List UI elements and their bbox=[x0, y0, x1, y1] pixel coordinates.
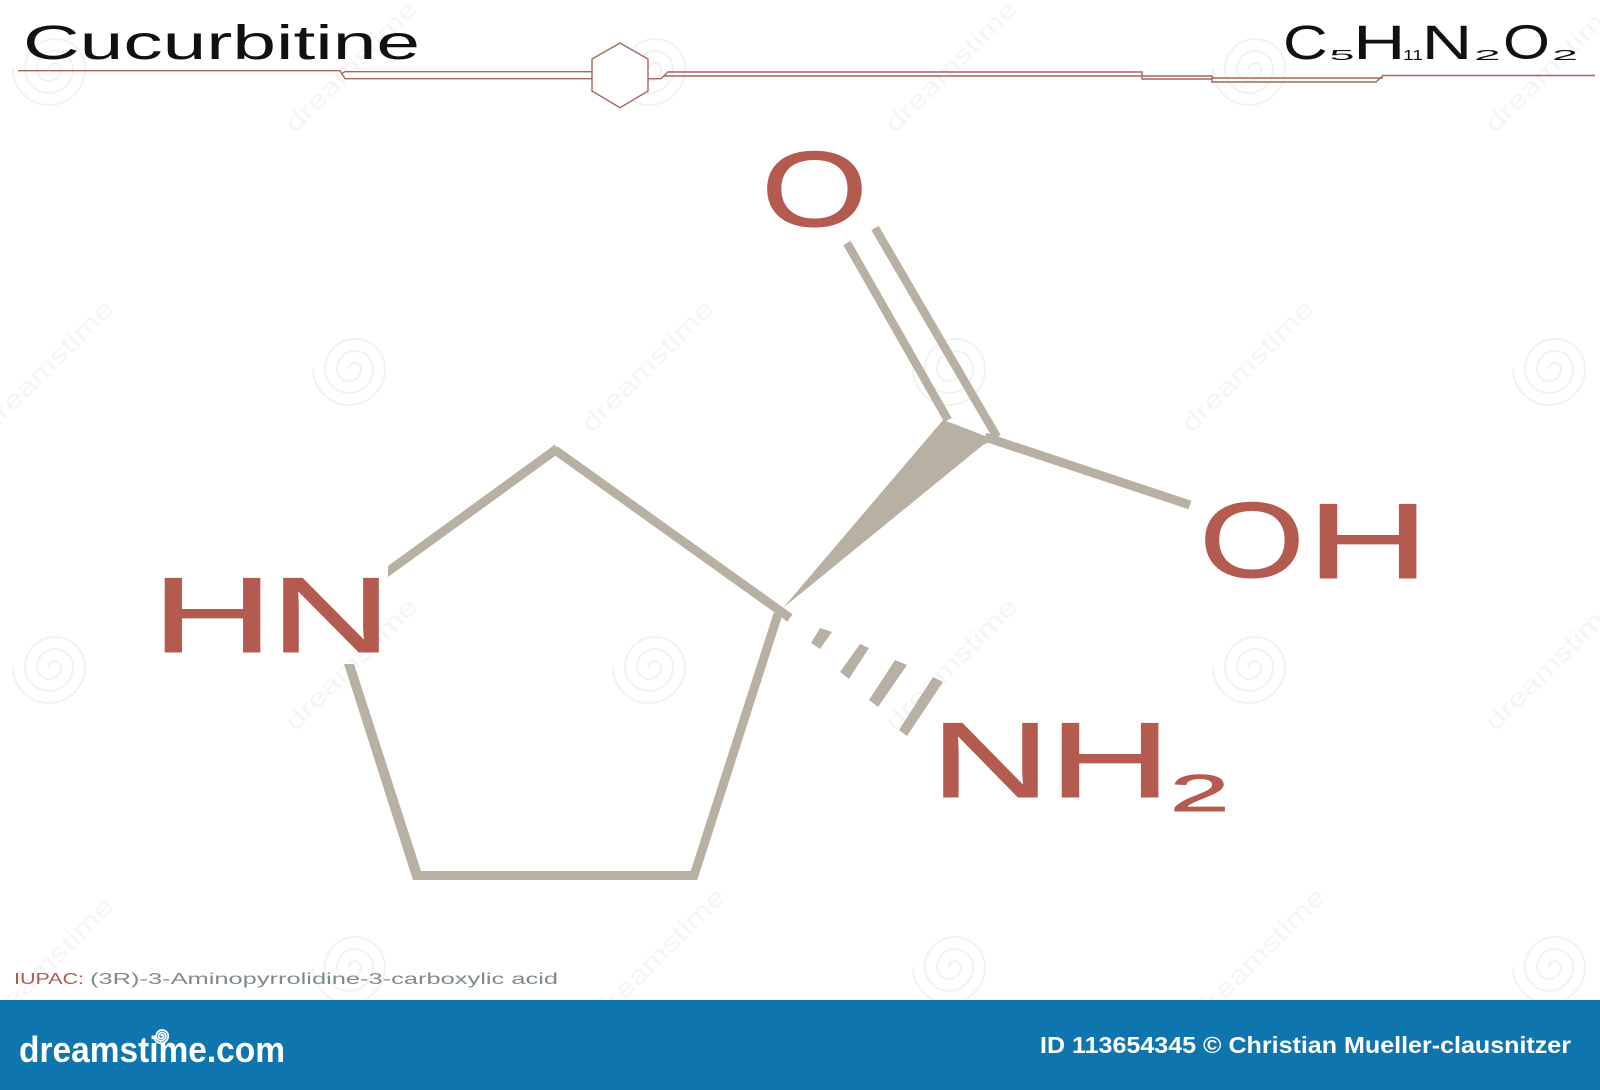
molecular formula: 5 bbox=[1330, 47, 1354, 64]
watermark pattern: dreamstime bbox=[280, 0, 423, 138]
molecular formula: O bbox=[1503, 16, 1550, 70]
footer bar bbox=[0, 1000, 1600, 1090]
watermark pattern: dreamstime bbox=[1176, 295, 1319, 438]
image id and credit: ID 113654345 © Christian Mueller-clausnitzer bbox=[1040, 1032, 1571, 1058]
atom label: NH2: 2 bbox=[1170, 765, 1229, 823]
molecular formula: 2 bbox=[1552, 47, 1578, 64]
molecular formula: N bbox=[1422, 17, 1472, 70]
watermark pattern: dreamstime bbox=[880, 593, 1023, 736]
icon: logo spiral bbox=[154, 1030, 168, 1043]
watermark pattern: dreamstime bbox=[576, 295, 719, 438]
title: Cucurbitine bbox=[23, 17, 420, 70]
watermark pattern: dreamstime bbox=[880, 0, 1023, 138]
molecular formula: C bbox=[1283, 17, 1328, 70]
watermark pattern: dreamstime bbox=[1480, 0, 1600, 138]
molecular formula: 11 bbox=[1403, 47, 1423, 64]
watermark pattern: dreamstime bbox=[1480, 593, 1600, 736]
bond to hydroxyl bbox=[985, 437, 1190, 505]
double bond to oxygen bbox=[847, 228, 997, 437]
pyrrolidine ring bonds bbox=[344, 444, 790, 880]
atom label: OH: H bbox=[1307, 481, 1430, 601]
dreamstime logo text: dreamstime.com bbox=[19, 1029, 285, 1070]
atom label: O: O bbox=[761, 129, 868, 249]
solid wedge bond bbox=[783, 420, 995, 608]
header rule with hexagon bbox=[18, 43, 1595, 108]
IUPAC name: (3R)-3-Aminopyrrolidine-3-carboxylic acid bbox=[90, 971, 558, 988]
atom label: HN: N bbox=[270, 555, 392, 675]
molecular formula: H bbox=[1353, 17, 1406, 70]
hashed wedge bond bbox=[811, 628, 943, 736]
molecule structure bbox=[152, 129, 1430, 880]
atom label: NH2: N bbox=[930, 700, 1051, 820]
watermark pattern: dreamstime bbox=[588, 883, 731, 1026]
atom label: HN: H bbox=[152, 555, 273, 675]
watermark pattern: dreamstime bbox=[280, 593, 423, 736]
atom label: OH: O bbox=[1199, 480, 1305, 600]
molecular formula: 2 bbox=[1474, 47, 1501, 64]
atom label: NH2: H bbox=[1049, 700, 1172, 820]
watermark pattern: dreamstime bbox=[1188, 883, 1331, 1026]
IUPAC name: IUPAC: bbox=[14, 971, 84, 988]
